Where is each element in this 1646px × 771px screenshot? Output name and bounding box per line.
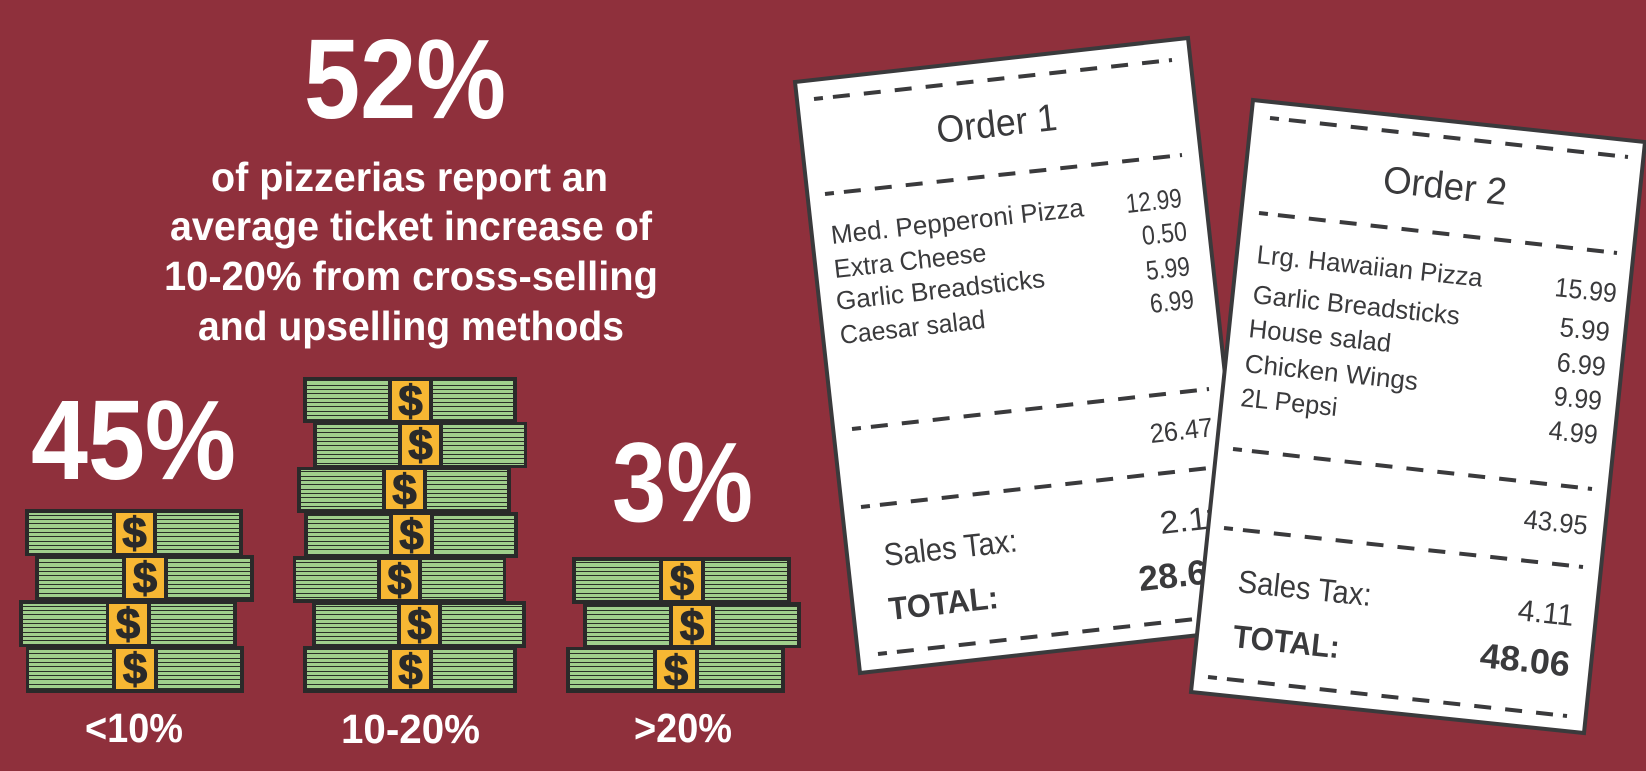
icon: stack of four bills: $ — [123, 645, 147, 694]
icon: stack of seven bills: $ — [398, 377, 423, 426]
list: order 2 items: House salad — [1247, 313, 1393, 358]
icon: stack of seven bills: $ — [407, 601, 432, 650]
stat: 3%: 3% — [612, 419, 753, 545]
icon: stack of seven bills: $ — [399, 511, 424, 560]
text block: 52% description: 10-20% from cross-selling — [164, 253, 658, 299]
heading: Order 1: Order 1 — [934, 97, 1059, 152]
icon: stack of seven bills: $ — [398, 646, 423, 695]
subtotal: order 1: 26.47 — [1148, 412, 1214, 449]
panel: under 10 percent group — [19, 377, 254, 751]
list: order 2 prices: 5.99 — [1558, 312, 1611, 347]
value: order 1 total: 28.60 — [1137, 551, 1228, 599]
label: order 2 sales tax: Sales Tax: — [1236, 563, 1373, 613]
icon: stack of four bills: $ — [133, 554, 157, 603]
list: order 1 items: Med. Pepperoni Pizza — [829, 192, 1086, 250]
label: 10 to 20 percent: 10-20% — [341, 706, 480, 752]
icon: stack of four bills: $ — [116, 600, 140, 649]
label: order 1 sales tax: Sales Tax: — [882, 522, 1019, 573]
icon: stack of seven bills — [293, 377, 527, 695]
icon: stack of three bills: $ — [670, 557, 694, 606]
text block: 52% description: average ticket increase of — [170, 203, 652, 249]
list: order 1 items: Caesar salad — [838, 304, 987, 350]
list: order 1 items: Extra Cheese — [832, 237, 988, 284]
icon: stack of seven bills: $ — [387, 556, 412, 605]
value: order 2 total: 48.06 — [1478, 636, 1572, 684]
stat: 45%: 45% — [31, 377, 236, 503]
list: order 2 prices: 9.99 — [1552, 381, 1603, 416]
icon: stack of three bills — [566, 557, 801, 696]
list: order 1 prices: 5.99 — [1144, 251, 1191, 286]
list: order 1 items: Garlic Breadsticks — [834, 263, 1046, 316]
label: under 10 percent: <10% — [85, 705, 183, 751]
panel: receipt order 1 — [795, 38, 1253, 673]
icon: stack of four bills: $ — [122, 509, 147, 558]
list: order 1 items — [829, 192, 1086, 350]
value: order 1 sales tax: 2.11 — [1158, 498, 1225, 541]
list: order 1 prices: 6.99 — [1148, 284, 1195, 319]
heading: 52% statistic: 52% — [304, 16, 506, 142]
list: order 2 items: 2L Pepsi — [1239, 382, 1339, 422]
list: order 2 prices: 15.99 — [1553, 272, 1618, 308]
list: order 2 prices: 6.99 — [1555, 347, 1607, 382]
list: order 2 prices: 4.99 — [1547, 415, 1599, 450]
icon: stack of four bills — [19, 509, 254, 694]
list: order 2 items: Lrg. Hawaiian Pizza — [1255, 239, 1485, 293]
label: order 1 total: TOTAL: — [887, 579, 1000, 627]
panel: receipt order 2 — [1191, 100, 1645, 733]
text block: 52% description: and upselling methods — [198, 303, 624, 349]
text block: 52% description — [164, 154, 658, 349]
list: order 2 items: Garlic Breadsticks — [1251, 279, 1461, 331]
list: order 1 prices: 0.50 — [1140, 216, 1188, 251]
icon: stack of seven bills: $ — [392, 466, 417, 515]
text block: 52% description: of pizzerias report an — [211, 154, 608, 200]
label: over 20 percent: >20% — [634, 705, 732, 751]
icon: stack of seven bills: $ — [408, 421, 433, 470]
value: order 2 sales tax: 4.11 — [1516, 594, 1575, 633]
panel: 10 to 20 percent group — [293, 377, 527, 752]
list: order 1 prices: 12.99 — [1124, 183, 1183, 219]
list: order 2 items: Chicken Wings — [1243, 348, 1420, 396]
icon: stack of three bills: $ — [664, 647, 688, 696]
icon: stack of three bills: $ — [680, 602, 704, 651]
subtotal: order 2: 43.95 — [1522, 504, 1589, 541]
list: order 2 items — [1239, 239, 1485, 422]
label: order 2 total: TOTAL: — [1231, 618, 1341, 665]
heading: Order 2: Order 2 — [1381, 159, 1509, 214]
list: order 1 prices — [1124, 183, 1195, 319]
panel: over 20 percent group — [566, 419, 801, 751]
list: order 2 prices — [1547, 272, 1618, 450]
